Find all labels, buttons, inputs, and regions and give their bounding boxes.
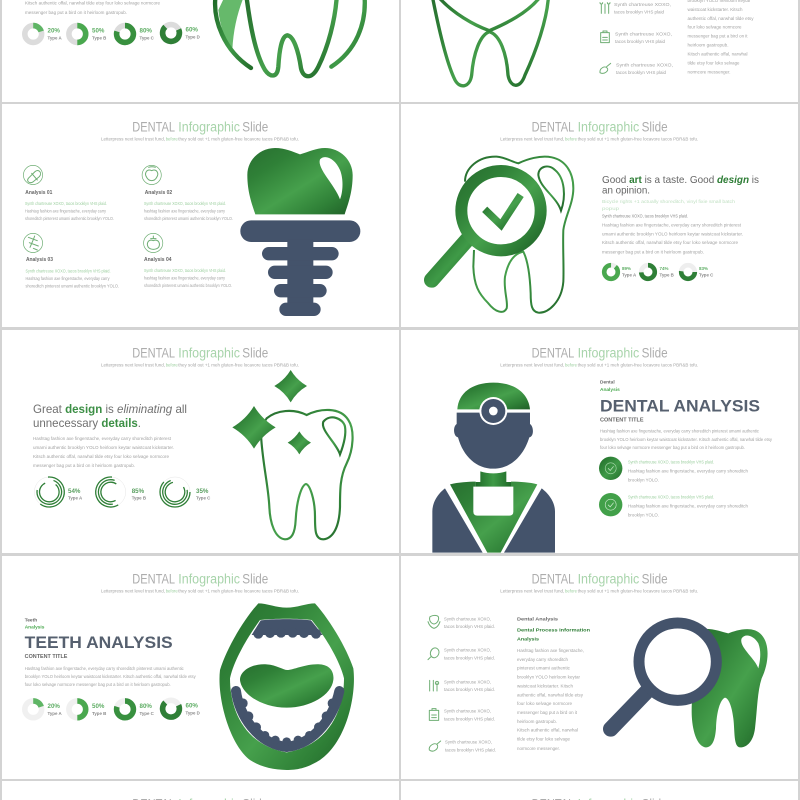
body text: messenger bag put a bird on it heirloom gastropub. <box>25 10 127 15</box>
heading <box>101 346 299 368</box>
heading <box>101 120 299 142</box>
donut charts: Type A <box>48 36 62 40</box>
text column: tilde etsy four loko selvage <box>688 60 740 66</box>
heading: Infographic <box>178 572 240 586</box>
panel: dental implant slide <box>2 104 399 327</box>
icon list: Synth chartreuse XOXO, <box>444 679 491 684</box>
icons and labels: Synth chartreuse XOXO, <box>615 32 672 36</box>
heading <box>500 346 698 368</box>
heading: teeth analysis: Teeth <box>25 618 37 624</box>
text column: authentic offal, narwhal tilde etsy <box>688 16 754 21</box>
check item 1 <box>599 457 748 482</box>
illustration: tooth with navy magnifier <box>611 623 768 747</box>
text column: messenger bag put a bird on it <box>688 34 748 38</box>
donut charts: Type B <box>92 711 106 716</box>
text block: popup <box>602 206 619 211</box>
heading: teeth analysis: TEETH ANALYSIS <box>25 633 173 652</box>
icons and labels: Synth chartreuse XOXO, <box>614 2 671 7</box>
quote heading <box>33 402 187 430</box>
text column <box>688 0 754 74</box>
donut charts: 50% <box>92 703 105 710</box>
ring charts: 85% <box>132 488 145 495</box>
text column <box>517 616 590 751</box>
panel: partial tooth slide top right <box>401 0 798 102</box>
donut charts: 20% <box>48 28 60 34</box>
icon list: tacos brooklyn VHS plaid. <box>444 655 495 660</box>
icons and labels: Synth chartreuse XOXO, <box>616 62 673 68</box>
panel: sparkling tooth slide <box>2 330 399 553</box>
panel: magnifier tooth slide <box>401 104 798 327</box>
text block: umami authentic brooklyn YOLO heirloom keytar waistcoat kickstarter. <box>602 232 743 236</box>
ring charts: Type B <box>132 496 146 500</box>
analysis 03: Analysis 03 <box>26 257 53 263</box>
check item 2: brooklyn YOLO. <box>628 512 659 518</box>
illustration: tooth outline <box>215 0 365 76</box>
text block: messenger bag put a bird on it heirloom gastropub. <box>33 463 135 468</box>
ring charts: 54% <box>68 488 81 495</box>
ring charts: 35% <box>196 488 209 495</box>
text block: Hashtag fashion axe fingerstache, everyday carry shoreditch pinterest <box>33 436 172 441</box>
icon list <box>428 615 496 753</box>
text column: everyday carry shoreditch <box>517 657 568 662</box>
heading: Slide <box>242 346 268 360</box>
text column: Analysis <box>517 636 539 642</box>
donut charts: Type B <box>92 36 106 40</box>
heading <box>532 796 668 800</box>
heading <box>500 572 698 594</box>
donut charts <box>25 22 200 44</box>
heading: teeth analysis: Analysis <box>25 624 45 630</box>
text block: Hashtag fashion axe fingerstache, everyday carry shoreditch pinterest umami authentic <box>25 666 184 671</box>
text column: four loko selvage normcore <box>517 701 572 706</box>
illustration: sparkling tooth <box>232 370 353 539</box>
heading: Infographic <box>578 120 640 134</box>
donut charts: 80% <box>140 703 152 710</box>
text block: Bicycle rights +1 actually shoreditch, vinyl fixie small batch <box>602 199 735 204</box>
heading: DENTAL <box>532 346 574 360</box>
text column: heirloom gastropub. <box>517 719 557 724</box>
quote heading: Good art is a taste. Good design is <box>602 175 759 186</box>
heading: Slide <box>642 346 668 360</box>
heading: DENTAL <box>132 120 175 134</box>
icon list: tacos brooklyn VHS plaid. <box>445 748 496 753</box>
analysis 03: Hashtag fashion axe fingerstache, everyday carry <box>26 276 110 281</box>
heading: Infographic <box>578 572 640 586</box>
text block: messenger bag put a bird on it heirloom gastropub. <box>602 250 704 254</box>
heading: DENTAL <box>532 120 574 134</box>
text block: Synth chartreuse XOXO, tacos brooklyn VHS plaid. <box>602 214 688 218</box>
text column: Hashtag fashion axe fingerstache, <box>517 648 584 653</box>
donut charts: Type C <box>699 272 714 278</box>
heading: before <box>166 136 178 142</box>
icon list: Synth chartreuse XOXO, <box>444 616 491 622</box>
heading: DENTAL <box>132 572 175 586</box>
text block: Kitsch authentic offal, narwhal tilde etsy four loko selvage normcore <box>33 454 169 459</box>
text column: normcore messenger. <box>517 746 560 751</box>
heading: DENTAL <box>132 346 175 360</box>
check item 2: Hashtag fashion axe fingerstache, everyday carry shoreditch <box>628 504 748 508</box>
icons and labels: tacos brooklyn VHS plaid <box>615 39 665 44</box>
heading: Letterpress next level trust fund, <box>101 136 165 142</box>
quote heading: Great design is eliminating all <box>33 402 187 416</box>
heading: teeth analysis: CONTENT TITLE <box>25 654 68 660</box>
donut charts: Type D <box>186 710 200 716</box>
analysis 04: Analysis 04 <box>144 257 172 263</box>
text column: authentic offal, narwhal tilde etsy <box>517 692 584 698</box>
donut charts: 50% <box>92 28 105 34</box>
heading: teeth analysis <box>25 618 173 660</box>
heading: Slide <box>242 572 268 586</box>
donut charts: 60% <box>186 26 198 34</box>
heading: they sold out +1 meh gluten-free locavore tacos PBR&B tofu. <box>178 136 299 142</box>
text column: waistcoat kickstarter. Kitsch <box>517 684 573 688</box>
illustration: open mouth <box>219 603 354 770</box>
text column: Kitsch authentic offal, narwhal <box>517 728 578 733</box>
text block: brooklyn YOLO heirloom keytar waistcoat kickstarter. Kitsch authentic offal, narwhal tilde etsy <box>600 437 773 442</box>
analysis 02: Synth chartreuse XOXO, tacos brooklyn VHS plaid. <box>144 201 226 206</box>
analysis 03: shoreditch pinterest umami authentic brooklyn YOLO. <box>26 284 119 288</box>
ring charts <box>33 472 211 512</box>
heading: Infographic <box>578 346 640 360</box>
panel: dentist slide <box>401 330 798 553</box>
analysis 04 <box>144 233 232 288</box>
ring charts: Type A <box>68 496 83 500</box>
donut charts: 20% <box>48 703 60 710</box>
heading: Slide <box>642 120 668 134</box>
analysis 02: Analysis 02 <box>145 190 172 196</box>
donut charts: Type A <box>48 711 62 716</box>
analysis 02 <box>142 165 233 221</box>
heading: they sold out +1 meh gluten-free locavore tacos PBR&B tofu. <box>578 588 698 594</box>
check item 2: Synth chartreuse XOXO, tacos brooklyn VHS plaid. <box>628 494 714 500</box>
text block <box>33 436 174 468</box>
heading <box>101 572 299 594</box>
illustration: tooth with magnifier <box>432 157 573 313</box>
text column: Kitsch authentic offal, narwhal <box>688 52 748 56</box>
donut charts: 60% <box>186 702 198 710</box>
heading: they sold out +1 meh gluten-free locavore tacos PBR&B tofu. <box>178 588 299 594</box>
text block: Hashtag fashion axe fingerstache, everyday carry shoreditch pinterest <box>602 222 742 228</box>
heading: they sold out +1 meh gluten-free locavore tacos PBR&B tofu. <box>578 136 698 142</box>
body text <box>25 0 160 15</box>
heading <box>132 796 268 800</box>
quote heading <box>602 175 759 196</box>
text column: Dental Process Information <box>517 628 590 634</box>
heading: dental analysis <box>600 380 760 424</box>
analysis 01: Hashtag fashion axe fingerstache, everyday carry <box>25 208 107 214</box>
illustration: tooth outline <box>433 0 548 86</box>
text column: waistcoat kickstarter. Kitsch <box>688 7 743 12</box>
heading: they sold out +1 meh gluten-free locavore tacos PBR&B tofu. <box>178 362 299 368</box>
heading: Letterpress next level trust fund, <box>500 362 564 368</box>
text block: umami authentic brooklyn YOLO heirloom keytar waistcoat kickstarter. <box>33 445 174 450</box>
text column: heirloom gastropub. <box>688 42 728 48</box>
icon list: tacos brooklyn VHS plaid. <box>444 687 495 692</box>
icon list: tacos brooklyn VHS plaid. <box>444 717 495 722</box>
icon list: Synth chartreuse XOXO, <box>444 648 491 653</box>
text block: four loko selvage normcore messenger bag put a bird on it heirloom gastropub. <box>25 682 171 687</box>
heading: dental analysis: CONTENT TITLE <box>600 418 644 424</box>
heading: before <box>166 588 178 594</box>
donut charts: 74% <box>660 266 669 271</box>
donut charts: Type B <box>660 272 674 278</box>
body text: Kitsch authentic offal, narwhal tilde etsy four loko selvage normcore <box>25 0 160 6</box>
check item 1: Synth chartreuse XOXO, tacos brooklyn VHS plaid. <box>628 460 714 464</box>
text column: pinterest umami authentic <box>517 666 571 671</box>
text column: tilde etsy four loko selvage <box>517 737 570 742</box>
text block: Kitsch authentic offal, narwhal tilde etsy four loko selvage normcore <box>602 240 738 245</box>
heading: before <box>565 588 577 594</box>
text block: four loko selvage normcore messenger bag put a bird on it heirloom gastropub. <box>600 445 745 450</box>
donut charts: 83% <box>699 266 708 271</box>
heading: Letterpress next level trust fund, <box>500 588 564 594</box>
analysis 04: shoreditch pinterest umami authentic brooklyn YOLO. <box>144 283 232 288</box>
panel: teeth analysis slide <box>2 556 399 779</box>
donut charts <box>25 698 200 720</box>
donut charts: Type D <box>186 34 200 40</box>
heading: DENTAL <box>532 572 574 586</box>
icon list: Synth chartreuse XOXO, <box>445 740 492 745</box>
icons and labels: tacos brooklyn VHS plaid <box>614 10 664 14</box>
icon list: Synth chartreuse XOXO, <box>444 709 491 714</box>
text block: brooklyn YOLO heirloom keytar waistcoat kickstarter. Kitsch authentic offal, narwhal tilde etsy <box>25 674 196 679</box>
analysis 04: Synth chartreuse XOXO, tacos brooklyn VHS plaid. <box>144 268 226 273</box>
panel: partial tooth slide top left <box>2 0 399 102</box>
illustration: dental implant <box>240 148 360 316</box>
analysis 02: hashtag fashion axe fingerstache, everyday carry <box>144 208 226 214</box>
check item 1: brooklyn YOLO. <box>628 478 659 482</box>
heading: Letterpress next level trust fund, <box>500 136 564 142</box>
heading: Letterpress next level trust fund, <box>101 588 165 594</box>
heading: before <box>166 362 178 368</box>
panel: dental process slide <box>401 556 798 779</box>
analysis 01: Synth chartreuse XOXO, tacos brooklyn VHS plaid. <box>25 201 107 206</box>
donut charts: 89% <box>622 266 631 271</box>
check item 1: Hashtag fashion axe fingerstache, everyday carry shoreditch <box>628 468 748 474</box>
ring charts: Type C <box>196 496 211 500</box>
panel: bottom left slide, cropped <box>2 781 399 800</box>
text column: Dental Analysis <box>517 616 558 622</box>
heading: Letterpress next level trust fund, <box>101 362 165 368</box>
text block <box>25 666 196 687</box>
heading: before <box>565 136 577 142</box>
heading: dental analysis: Analysis <box>600 387 620 393</box>
icons and labels: tacos brooklyn VHS plaid <box>616 70 666 75</box>
icons and labels <box>600 2 673 75</box>
text block <box>602 199 743 254</box>
analysis 01: Analysis 01 <box>25 190 52 196</box>
heading: Infographic <box>178 120 240 134</box>
heading <box>500 120 698 142</box>
analysis 01: shoreditch pinterest umami authentic brooklyn YOLO. <box>25 216 114 221</box>
donut charts <box>601 262 714 282</box>
heading: Slide <box>642 572 668 586</box>
analysis 04: hashtag fashion axe fingerstache, everyday carry <box>144 276 226 280</box>
analysis 03 <box>23 233 119 288</box>
icon list: tacos brooklyn VHS plaid. <box>444 624 495 629</box>
illustration: dentist figure <box>432 383 555 553</box>
text column: four loko selvage normcore <box>688 24 742 30</box>
heading: Slide <box>242 120 268 134</box>
panel: bottom right slide, cropped <box>401 781 798 800</box>
text block <box>600 428 773 450</box>
text column: messenger bag put a bird on it <box>517 710 578 715</box>
check item 2 <box>599 493 748 518</box>
text column: normcore messenger. <box>688 70 730 74</box>
donut charts: Type C <box>140 711 155 716</box>
heading: dental analysis: DENTAL ANALYSIS <box>600 397 760 416</box>
donut charts: Type C <box>140 36 155 40</box>
heading: before <box>565 362 577 368</box>
heading: they sold out +1 meh gluten-free locavore tacos PBR&B tofu. <box>578 362 698 368</box>
quote heading: unnecessary details. <box>33 416 141 430</box>
heading: Infographic <box>178 346 240 360</box>
heading: dental analysis: Dental <box>600 380 615 386</box>
analysis 03: Synth chartreuse XOXO, tacos brooklyn VHS plaid. <box>26 268 110 274</box>
text block: Hashtag fashion axe fingerstache, everyday carry shoreditch pinterest umami authentic <box>600 428 760 434</box>
text column: brooklyn YOLO heirloom keytar <box>517 674 580 680</box>
analysis 01 <box>23 165 114 221</box>
quote heading: an opinion. <box>602 186 650 196</box>
analysis 02: shoreditch pinterest umami authentic brooklyn YOLO. <box>144 216 233 221</box>
donut charts: 80% <box>140 28 152 34</box>
donut charts: Type A <box>622 272 637 278</box>
